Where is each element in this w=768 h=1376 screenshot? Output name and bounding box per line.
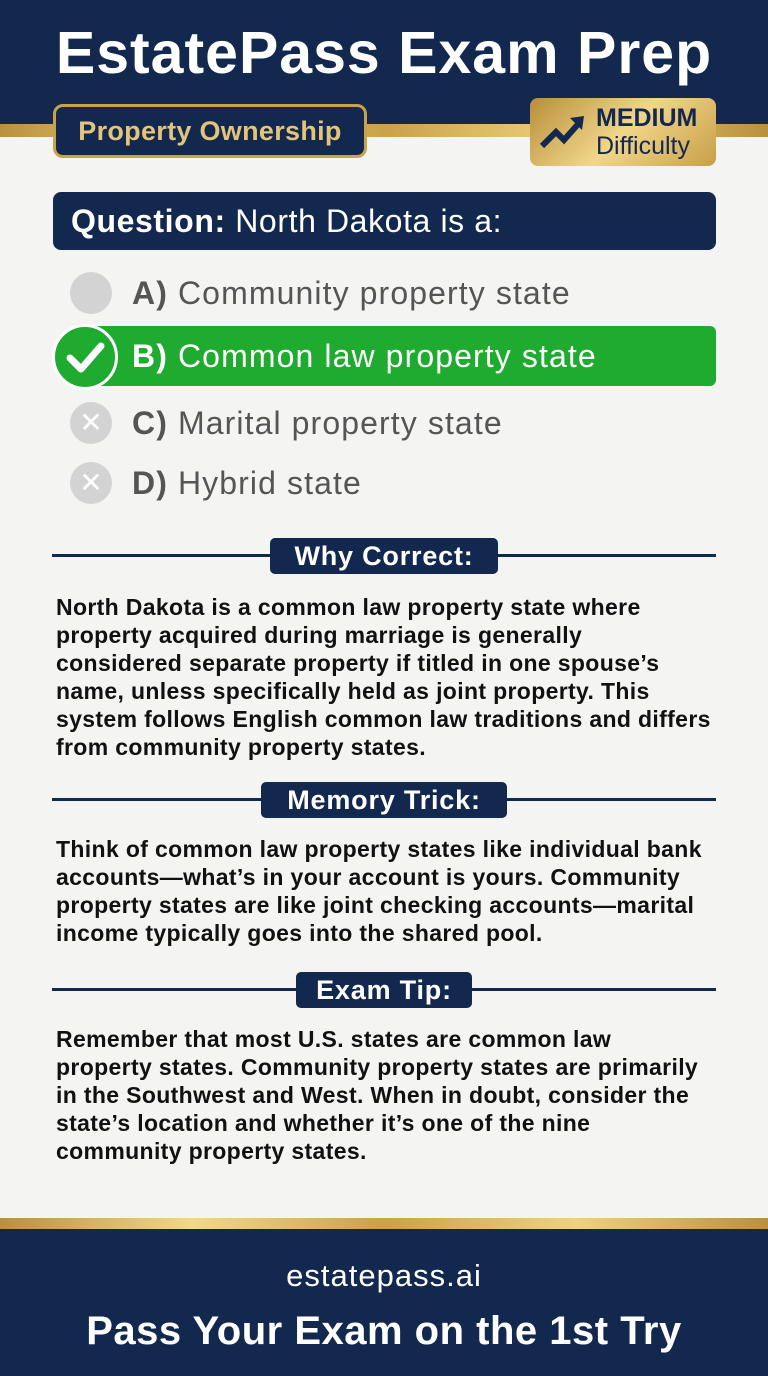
text: exam tip: property states. Community property states are primarily bbox=[56, 1054, 698, 1080]
heading: memory trick bbox=[52, 782, 716, 818]
text: memory trick: Think of common law property states like individual bank bbox=[56, 836, 702, 862]
text: memory trick: property states are like joint checking accounts—marital bbox=[56, 892, 694, 918]
text: exam tip: state’s location and whether it’s one of the nine bbox=[56, 1110, 590, 1136]
text: memory trick: accounts—what’s in your account is yours. Community bbox=[56, 864, 680, 890]
heading: why correct bbox=[52, 538, 716, 574]
heading: why correct: Why Correct: bbox=[294, 541, 474, 571]
text: exam tip: community property states. bbox=[56, 1138, 367, 1164]
text: exam tip: Remember that most U.S. states are common law bbox=[56, 1026, 611, 1052]
text: why correct: system follows English common law traditions and differs bbox=[56, 706, 711, 732]
footer tagline: Pass Your Exam on the 1st Try bbox=[86, 1309, 682, 1353]
difficulty badge bbox=[530, 98, 716, 166]
option D: D) Hybrid state bbox=[132, 465, 362, 501]
text: why correct: property acquired during marriage is generally bbox=[56, 622, 582, 648]
difficulty badge: MEDIUM bbox=[596, 104, 697, 132]
option B correct: B) Common law property state bbox=[132, 338, 597, 374]
option B correct bbox=[52, 324, 716, 390]
text: memory trick bbox=[56, 836, 702, 946]
footer url: estatepass.ai bbox=[286, 1258, 482, 1293]
footer bbox=[0, 1218, 768, 1376]
text: why correct: considered separate property if titled in one spouse’s bbox=[56, 650, 659, 676]
heading: exam tip bbox=[52, 972, 716, 1008]
heading: exam tip: Exam Tip: bbox=[316, 975, 452, 1005]
header band bbox=[0, 0, 768, 124]
text: why correct bbox=[56, 594, 711, 760]
text: why correct: name, unless specifically held as joint property. This bbox=[56, 678, 650, 704]
category badge bbox=[53, 104, 367, 158]
option D: ✕ bbox=[79, 467, 103, 498]
text: why correct: from community property states. bbox=[56, 734, 426, 760]
question bar bbox=[53, 192, 716, 250]
icon: trend arrow bbox=[540, 116, 584, 148]
option C: C) Marital property state bbox=[132, 405, 503, 441]
option D bbox=[70, 462, 362, 504]
text: exam tip bbox=[56, 1026, 698, 1164]
option C: ✕ bbox=[79, 407, 103, 438]
text: exam tip: in the Southwest and West. When in doubt, consider the bbox=[56, 1082, 689, 1108]
text: memory trick: income typically goes into the shared pool. bbox=[56, 920, 543, 946]
option A: A) Community property state bbox=[132, 275, 571, 311]
difficulty badge: Difficulty bbox=[596, 132, 690, 160]
heading: memory trick: Memory Trick: bbox=[287, 785, 481, 815]
text: why correct: North Dakota is a common law property state where bbox=[56, 594, 641, 620]
category badge: Property Ownership bbox=[78, 116, 342, 146]
question bar: Question: North Dakota is a: bbox=[71, 203, 502, 239]
title: EstatePass Exam Prep bbox=[56, 20, 712, 86]
